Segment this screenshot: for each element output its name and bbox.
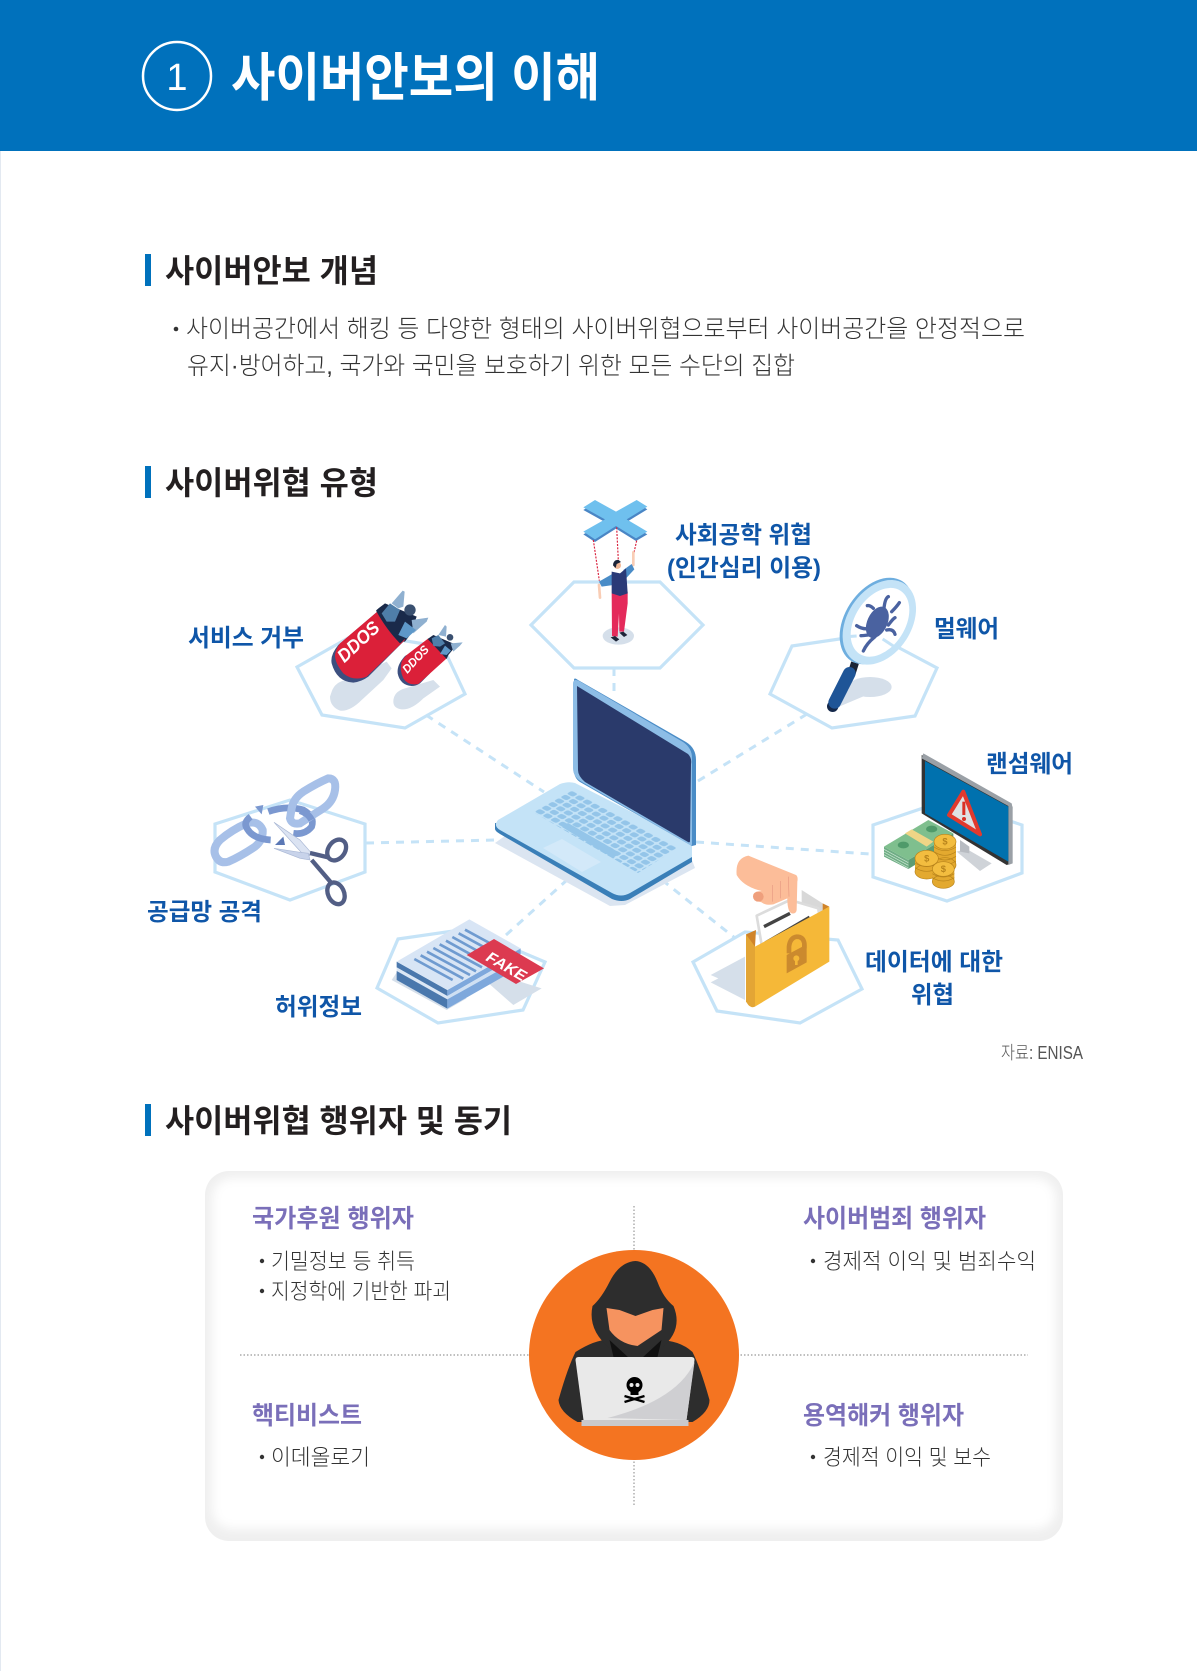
heading: threat actors and motives: 사이버위협 행위자 및 동기 (165, 1103, 512, 1139)
label: denial of service: 서비스 거부 (188, 625, 304, 652)
label: malware: 멀웨어 (934, 616, 999, 643)
quadrant: hackers for hire: 용역해커 행위자 (803, 1402, 964, 1430)
icon: DDoS bombs (330, 591, 463, 711)
section number badge (143, 42, 211, 110)
quadrant: cybercriminals: 경제적 이익 및 범죄수익 (823, 1249, 1036, 1274)
left link (215, 822, 263, 862)
icon: ransomware monitor and money: $ (941, 864, 947, 874)
bug (857, 597, 899, 651)
heading: threat types: 사이버위협 유형 (165, 465, 378, 501)
quadrant: state-sponsored: 지정학에 기반한 파괴 (271, 1279, 451, 1304)
section: concept (145, 253, 1025, 380)
scissors (274, 822, 350, 907)
fake stamp: FAKE (483, 949, 530, 986)
label: disinformation: 허위정보 (275, 994, 362, 1021)
header band (0, 0, 1197, 151)
monitor (922, 753, 1013, 871)
quadrant: state-sponsored (252, 1205, 451, 1304)
section number badge: 1 (166, 57, 188, 99)
concept description: 사이버공간에서 해킹 등 다양한 형태의 사이버위협으로부터 사이버공간을 안정적으로 (186, 315, 1025, 343)
label: threats to data: 데이터에 대한 (865, 949, 1003, 976)
label: supply chain attack: 공급망 공격 (147, 899, 262, 926)
label: threats to data: 위협 (911, 982, 954, 1009)
cash stack (884, 820, 953, 869)
bomb: large: DDOS (333, 616, 384, 666)
concept description (174, 315, 1025, 380)
icon: ransomware monitor and money: $ (924, 854, 930, 864)
quadrant: hacktivists: 핵티비스트 (252, 1402, 362, 1430)
icon: ransomware monitor and money (884, 753, 1013, 888)
quadrant: hacktivists (252, 1402, 370, 1470)
laptop with skull (576, 1357, 694, 1426)
hexagon outlines (215, 582, 1022, 1023)
panel: threat actors (205, 1171, 1063, 1541)
icon: ransomware monitor and money: $ (942, 837, 948, 847)
concept description: 유지·방어하고, 국가와 국민을 보호하기 위한 모든 수단의 집합 (187, 352, 795, 380)
padlock (787, 937, 807, 973)
heading: concept: 사이버안보 개념 (165, 253, 378, 289)
source note: 자료: ENISA (1001, 1043, 1083, 1063)
quadrant: state-sponsored: 기밀정보 등 취득 (271, 1249, 415, 1274)
broken link (246, 808, 312, 840)
icon: puppet on strings (583, 500, 647, 645)
dashed connectors (366, 668, 870, 938)
fake stamp (467, 939, 544, 986)
quadrant: hackers for hire: 경제적 이익 및 보수 (823, 1445, 991, 1470)
label: social engineering (667, 522, 821, 582)
threat diagram (147, 500, 1083, 1063)
title: 사이버안보의 이해 (231, 50, 600, 108)
laptop (495, 678, 696, 906)
quadrant: cybercriminals (803, 1205, 1036, 1274)
quadrant: hackers for hire (803, 1402, 991, 1470)
icon: broken chain and scissors (215, 778, 350, 907)
icon: magnifier with bug (824, 564, 931, 712)
quadrant: state-sponsored: 국가후원 행위자 (252, 1205, 414, 1233)
hand (736, 856, 798, 914)
label: threats to data (865, 949, 1003, 1009)
label: social engineering: 사회공학 위협 (675, 522, 812, 549)
quadrant: hacktivists: 이데올로기 (271, 1445, 370, 1470)
quadrant: cybercriminals: 사이버범죄 행위자 (803, 1205, 986, 1233)
label: ransomware: 랜섬웨어 (986, 751, 1073, 778)
label: social engineering: (인간심리 이용) (667, 555, 821, 582)
hacker illustration (529, 1250, 739, 1460)
icon: fake news papers (392, 919, 544, 1010)
bomb: small: DDOS (399, 643, 432, 676)
coin stacks (915, 834, 956, 888)
icon: locked folder and hand (711, 856, 829, 1007)
top link (290, 778, 335, 824)
